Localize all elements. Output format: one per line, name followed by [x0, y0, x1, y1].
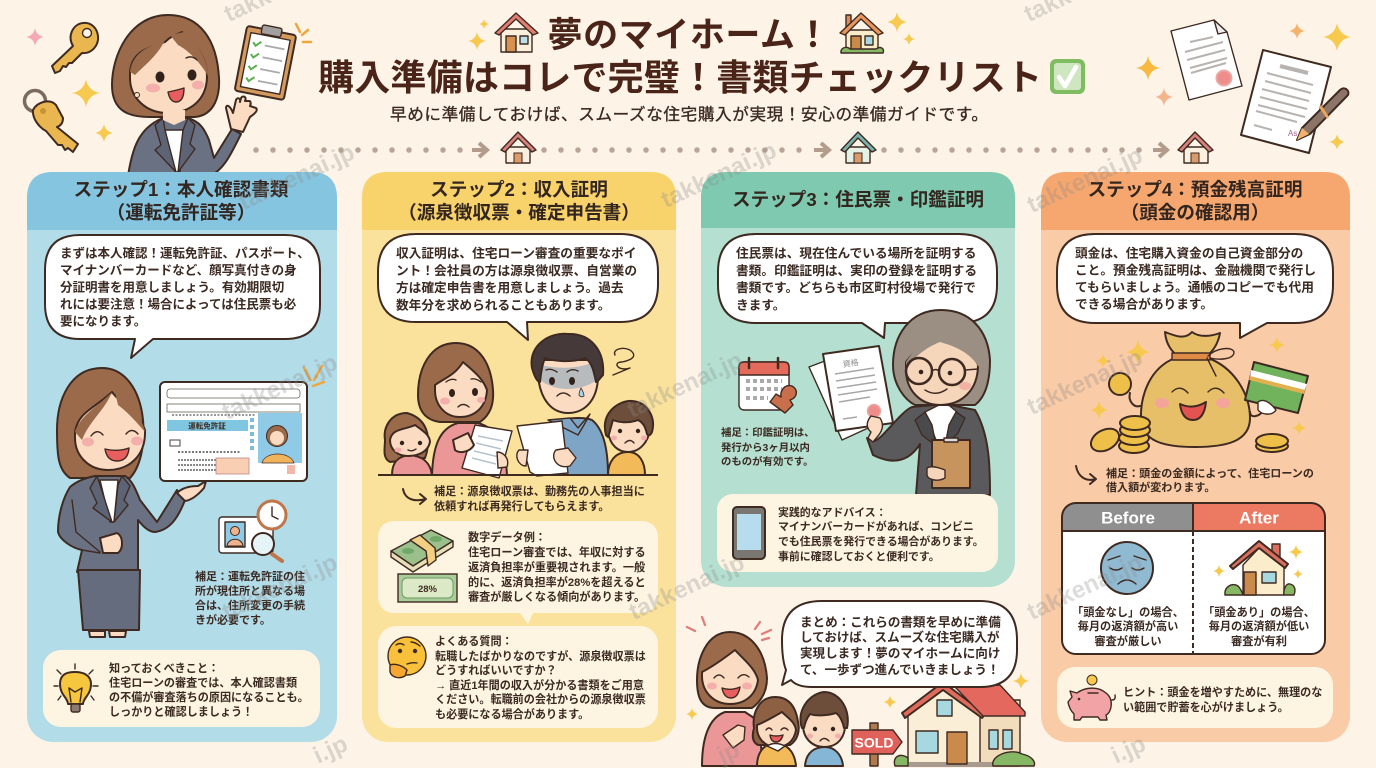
icon: green check badge: [1050, 59, 1085, 94]
decoration: keys and sparkles top left: [24, 23, 113, 152]
icon: driving licence card: 運転免許証: [188, 420, 226, 430]
panel 4 heading: （頭金の確認用）: [1121, 202, 1269, 223]
panel: step 3: [701, 172, 1015, 587]
speech bubble: step 2: 収入証明は、住宅ローン審査の重要なポイ: [396, 246, 636, 260]
icon: banknote with percentage: 28%: [418, 584, 438, 595]
panel 2 heading: （源泉徴収票・確定申告書）: [398, 202, 640, 223]
mother: [418, 343, 507, 475]
watermarks: takkenai.jp: [1023, 549, 1147, 626]
father: [532, 334, 608, 475]
after column: [1193, 503, 1325, 648]
data box: numeric example: [378, 521, 658, 624]
before column: Before: [1101, 508, 1155, 528]
icon: happy house: [1213, 541, 1303, 595]
watermarks: takkenai.jp: [1023, 344, 1147, 421]
note: step 1: 補足：運転免許証の住: [195, 569, 305, 583]
speech bubble: step 1: れには要注意！場合によっては住民票も必: [60, 296, 297, 312]
document in mother's hands: [453, 425, 512, 478]
tip text: 知っておくべきこと：: [109, 661, 219, 675]
house with red roof: [884, 673, 1034, 767]
after column: 審査が有利: [1231, 634, 1287, 648]
panel 3 heading: ステップ3：住民票・印鑑証明: [732, 189, 984, 210]
icon: calendar and stamp: [739, 358, 796, 413]
advice box: [717, 494, 998, 572]
icon: gold coins: [1087, 416, 1288, 456]
character: older woman with glasses: [867, 310, 990, 495]
icon: light bulb: [54, 664, 98, 712]
character: presenter woman in suit: [112, 15, 257, 176]
speech bubble: summary: しておけば、スムーズな住宅購入が: [800, 630, 1000, 644]
note: step 1: 所が現住所と異なる場: [195, 584, 305, 598]
character: woman holding licence: [57, 368, 206, 637]
title: 購入準備はコレで完璧！書類チェックリスト: [318, 57, 1042, 98]
icon: id card, clock and magnifier: [219, 501, 286, 561]
panel 3 heading: [701, 172, 1015, 228]
hint box: [1057, 667, 1333, 728]
note: step 3: 発行から3ヶ月以内: [721, 441, 810, 454]
speech bubble: step 1: マイナンバーカードなど、顔写真付きの身: [60, 262, 297, 278]
speech bubble: summary: [782, 601, 1017, 687]
advice text: 事前に確認しておくと便利です。: [778, 549, 940, 563]
note: step 2: 依頼すれば再発行してもらえます。: [434, 499, 610, 513]
icon: progress house 1: [501, 132, 536, 163]
icon: progress house 2: [841, 132, 876, 163]
FAQ text: も必要になる場合があります。: [435, 707, 589, 721]
speech bubble: step 4: できる場合があります。: [1075, 296, 1213, 312]
FAQ text: ください。転職前の会社からの源泉徴収票: [435, 692, 646, 706]
panel 2 heading: ステップ2：収入証明: [430, 179, 608, 200]
watermarks: takkenai.jp: [1023, 142, 1147, 219]
panel 2 background: [362, 172, 676, 742]
speech bubble: step 2: 数年分を求められることもあります。: [396, 298, 610, 312]
table line: [378, 474, 658, 476]
icon: title house left: [468, 13, 538, 52]
watermarks: takkenai.jp: [218, 549, 342, 626]
speech bubble: summary: まとめ：これらの書類を早めに準備: [800, 614, 1001, 630]
hint text: い範囲で貯蓄を心がけましょう。: [1123, 700, 1289, 714]
FAQ text: 転職したばかりなのですが、源泉徴収票は: [435, 649, 646, 663]
icon: progress house 3: [1178, 132, 1213, 163]
speech bubble: step 4: こと。預金残高証明は、金融機関で発行し: [1075, 262, 1316, 278]
icon: green bank card: [1245, 362, 1308, 414]
panel 1 heading: （運転免許証等）: [107, 202, 255, 223]
speech bubble: step 1: 分証明書を用意しましょう。有効期限切: [60, 280, 284, 294]
panel 2 heading: [362, 172, 676, 230]
icon: driving licence card: [160, 382, 307, 481]
documents, pen and sparkles top right: As: [1288, 129, 1297, 138]
speech bubble: summary: て、一歩ずつ進んでいきましょう！: [800, 662, 1000, 677]
speech bubble: step 4: てもらいましょう。通帳のコピーでも代用: [1075, 280, 1314, 294]
data text: 住宅ローン審査では、年収に対する: [468, 545, 646, 559]
note: step 2: 補足：源泉徴収票は、勤務先の人事担当に: [434, 484, 645, 498]
note: step 1: きが必要です。: [195, 612, 271, 626]
note: step 4: 借入額が変わります。: [1106, 480, 1215, 494]
tip text: の不備が審査落ちの原因になることも。: [109, 690, 309, 704]
speech bubble: step 3: [718, 234, 997, 338]
advice text: 実践的なアドバイス：: [778, 505, 887, 519]
after column: 「頭金あり」の場合、: [1203, 605, 1315, 619]
watermarks: takkenai.jp: [218, 349, 342, 426]
icon: smartphone: [733, 507, 765, 559]
speech bubble: step 2: ント！会社員の方は源泉徴収票、自営業の: [396, 263, 637, 278]
hint text: ヒント：頭金を増やすために、無理のな: [1123, 685, 1322, 699]
speech bubble: summary: 実現します！夢のマイホームに向け: [800, 646, 1000, 660]
advice text: でも住民票を発行できる場合があります。: [778, 534, 984, 548]
mother: [697, 632, 767, 766]
speech bubble: step 3: 書類。印鑑証明は、実印の登録を証明する: [736, 263, 977, 278]
panel 1 background: [27, 172, 337, 742]
speech bubble: step 2: [378, 234, 658, 340]
note: step 4: [1076, 466, 1314, 494]
speech bubble: step 3: 書類です。どちらも市区町村役場で発行で: [736, 280, 976, 295]
title: [318, 16, 1042, 98]
icon: clipboard checklist: [235, 22, 297, 100]
tip text: 住宅ローンの審査では、本人確認書類: [109, 676, 297, 690]
watermarks: takkenai.jp: [623, 347, 747, 424]
speech bubble: step 1: 要になります。: [60, 314, 146, 328]
icon: stack of banknotes: [391, 530, 453, 572]
icon: certificate documents: [809, 346, 893, 440]
after column: After: [1239, 508, 1279, 528]
data text: 的に、返済負担率が28%を超えると: [468, 575, 646, 589]
note: step 3: のものが有効です。: [721, 455, 813, 468]
before column: 毎月の返済額が高い: [1078, 619, 1178, 633]
panel 1 heading: [27, 172, 337, 230]
speech bubble: step 4: 頭金は、住宅購入資金の自己資金部分の: [1075, 246, 1303, 260]
subtitle: 早めに準備しておけば、スムーズな住宅購入が実現！安心の準備ガイドです。: [390, 105, 988, 124]
tip text: しっかりと確認しましょう！: [109, 704, 253, 718]
speech bubble: step 3: 住民票は、現在住んでいる場所を証明する: [736, 246, 976, 260]
panel: step 4: [1041, 172, 1350, 742]
dotted progress path with arrows: [256, 143, 1167, 157]
icon: thinking face: [388, 637, 426, 678]
note: step 3: 補足：印鑑証明は、: [721, 426, 815, 439]
tip box: things to know: [43, 650, 320, 727]
girl: [753, 697, 799, 766]
data text: 審査が厳しくなる傾向があります。: [468, 590, 645, 604]
summary illustration: [686, 601, 1034, 767]
FAQ text: よくある質問：: [435, 634, 513, 648]
note: step 2: [403, 484, 645, 513]
before column: [1062, 503, 1193, 648]
documents, pen and sparkles top right: [1136, 20, 1351, 153]
icon: certificate documents: 資格: [842, 357, 859, 369]
decoration: orange rays near licence: [304, 366, 324, 386]
data text: 数字データ例：: [468, 530, 546, 544]
speech bubble: step 1: [45, 235, 320, 358]
speech bubble: step 4: [1057, 234, 1333, 338]
watermarks: takkenai.jp: [657, 137, 781, 214]
panel 1 heading: ステップ1：本人確認書類: [74, 179, 289, 200]
before column: 審査が厳しい: [1094, 634, 1162, 648]
worry squiggle: [613, 348, 634, 375]
title: 夢のマイホーム！: [548, 16, 830, 55]
after column: 毎月の返済額が低い: [1209, 619, 1309, 633]
panel 3 background: [701, 172, 1015, 587]
before and after comparison: [1062, 503, 1325, 654]
data text: 返済負担率が重要視されます。一般: [468, 560, 645, 574]
FAQ box: [378, 626, 658, 728]
panel 4 heading: ステップ4：預金残高証明: [1088, 179, 1302, 200]
panel: step 1: [27, 172, 337, 742]
panel 4 background: [1041, 172, 1350, 742]
SOLD sign: SOLD: [855, 734, 893, 750]
SOLD sign: [852, 723, 902, 766]
decoration: rays and sparkle around mother: [686, 617, 771, 720]
panel 4 heading: [1041, 172, 1350, 230]
icon: clipboard held by older woman: [927, 438, 970, 488]
illustration: worried family: [378, 334, 658, 478]
document in father's hands: [517, 421, 576, 476]
icon: title house right: [840, 12, 915, 53]
illustration: money bag mascot: [1090, 332, 1306, 447]
watermarks: takkenai.jp: [235, 139, 359, 216]
speech bubble: step 2: 方は確定申告書を用意しましょう。過去: [396, 280, 624, 295]
note: step 1: 合は、住所変更の手続: [195, 598, 305, 612]
boy: [605, 401, 653, 475]
before column: 「頭金なし」の場合、: [1072, 605, 1184, 619]
speech bubble: step 3: きます。: [736, 298, 785, 312]
note: step 4: 補足：頭金の金額によって、住宅ローンの: [1106, 466, 1314, 480]
advice text: マイナンバーカードがあれば、コンビニ: [778, 519, 974, 533]
FAQ text: どうすればいいですか？: [435, 663, 557, 677]
boy: [800, 692, 848, 766]
panel: step 2: [362, 172, 676, 742]
FAQ text: → 直近1年間の収入が分かる書類をご用意: [435, 678, 644, 692]
icon: banknote with percentage: [398, 574, 457, 602]
watermarks: [218, 0, 1150, 768]
speech bubble: step 1: まずは本人確認！運転免許証、パスポート、: [60, 246, 310, 260]
watermarks: takkenai.jp: [625, 549, 749, 626]
icon: piggy bank: [1068, 675, 1115, 720]
girl: [384, 413, 432, 475]
decoration: orange rays: [296, 24, 311, 42]
